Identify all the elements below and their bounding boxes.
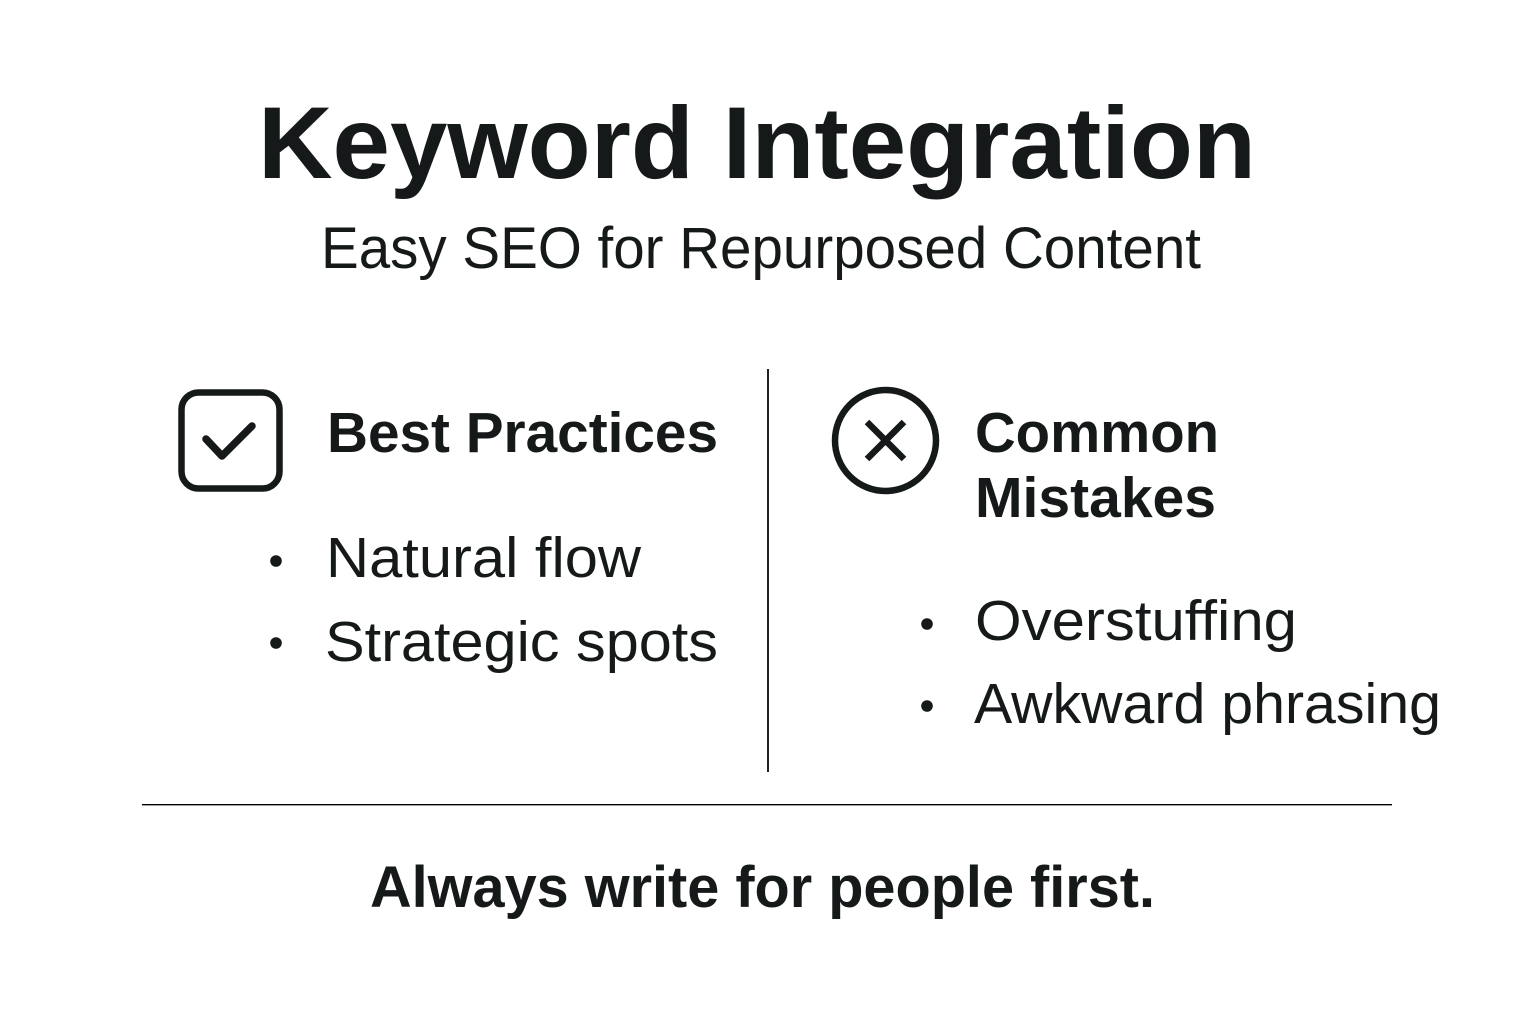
list: best practices: Natural flow	[326, 526, 642, 590]
heading: common mistakes: Common	[975, 401, 1219, 465]
panel: common mistakes	[835, 390, 1441, 736]
list: common mistakes: Overstuffing	[975, 589, 1297, 653]
title: Keyword Integration	[258, 86, 1256, 200]
list: common mistakes	[921, 589, 1441, 736]
icon: x in circle	[835, 390, 936, 491]
list: common mistakes: Awkward phrasing	[974, 672, 1441, 736]
list: best practices: Strategic spots	[325, 610, 718, 674]
heading: common mistakes: Mistakes	[975, 466, 1216, 530]
panel: best practices	[182, 392, 718, 674]
heading: best practices: Best Practices	[327, 401, 718, 465]
heading: common mistakes	[975, 401, 1219, 530]
icon: check box	[182, 392, 280, 488]
subtitle: Easy SEO for Repurposed Content	[321, 216, 1201, 281]
list: best practices	[270, 526, 718, 674]
footer message: Always write for people first.	[370, 855, 1155, 920]
